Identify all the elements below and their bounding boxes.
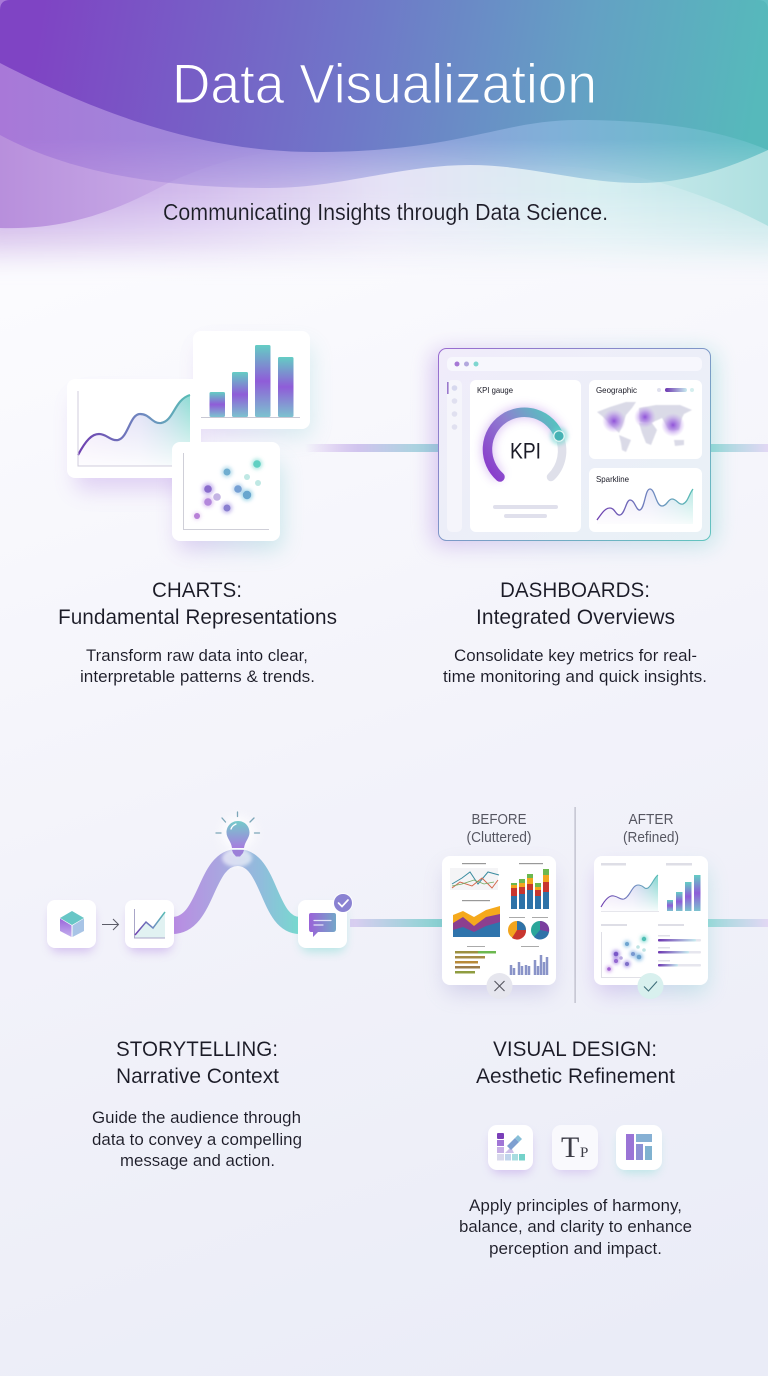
before label: (Cluttered) [466,829,532,846]
KPI gauge card: KPI gauge [477,385,513,395]
heading: dashboards: Integrated Overviews [476,606,675,629]
icon: data cube tile [47,900,96,952]
geographic map card: Geographic [596,385,638,395]
KPI gauge card: KPI [510,438,541,464]
description: visual design: balance, and clarity to enhance [459,1217,692,1236]
ribbon path [172,858,300,926]
description: charts: interpretable patterns & trends. [80,667,315,686]
badge: before cross [486,973,512,999]
connector: design onward [708,919,768,927]
before label [466,811,532,846]
panel: before cluttered dashboard [442,856,556,993]
title: Data Visualization [172,52,597,115]
heading: storytelling: Narrative Context [116,1065,279,1088]
sparkline card [589,468,702,532]
heading: charts [58,579,337,629]
heading: dashboards [476,579,675,629]
icon: chart tile [125,900,174,952]
cluttered pie charts [508,917,549,940]
window title bar [447,357,702,371]
cluttered area chart [453,900,500,937]
badge: after check [638,973,664,999]
panel: storytelling flow [47,812,353,952]
before label: BEFORE [472,811,526,828]
connector: storytelling to design [350,919,442,927]
heading: dashboards: DASHBOARDS: [500,579,650,602]
description: dashboards: Consolidate key metrics for real- [454,646,697,665]
description: storytelling: message and action. [120,1151,275,1170]
icon: lightbulb [216,812,260,856]
geographic map card [589,380,702,459]
description: storytelling: data to convey a compelling [92,1130,302,1149]
heading: storytelling: STORYTELLING: [116,1038,278,1061]
heading: charts: CHARTS: [152,579,242,602]
after label [623,811,679,846]
bar chart card [193,331,310,429]
description: charts [80,646,315,686]
panel: dashboard mockup [432,348,716,546]
icon: typography: P [580,1145,588,1161]
connector: charts to dashboards [305,444,439,452]
icon: typography: T [561,1131,579,1164]
line chart card [67,379,201,478]
refined scatter plot [602,932,656,978]
ribbon highlight [222,849,252,867]
heading: visual design: Aesthetic Refinement [476,1065,675,1088]
description: dashboards [443,646,707,686]
soft glow shadows [75,345,312,550]
after label: AFTER [628,811,674,828]
icon: layout grid [616,1125,662,1173]
cluttered horizontal bars [455,946,496,974]
KPI gauge card [470,380,581,532]
refined bar chart [667,875,700,911]
cluttered stacked bars [511,869,549,909]
refined area chart [601,875,659,912]
arrow [102,919,118,930]
description: dashboards: time monitoring and quick insights. [443,667,707,686]
sparkline card: Sparkline [596,474,629,484]
description: visual design: Apply principles of harmony, [469,1196,682,1215]
subtitle: Communicating Insights through Data Science. [163,199,608,225]
after label: (Refined) [623,829,679,846]
cluttered grouped bars [511,946,547,975]
heading: visual design: VISUAL DESIGN: [493,1038,657,1061]
heading: visual design [476,1038,675,1088]
scatter plot card [172,442,280,541]
panel: after refined dashboard [594,856,708,993]
panel: charts cluster [67,331,312,550]
icon: typography [552,1125,598,1173]
sidebar [447,380,462,532]
description: storytelling: Guide the audience through [92,1108,301,1127]
cluttered line chart [450,863,543,890]
description: visual design [459,1196,692,1258]
heading: charts: Fundamental Representations [58,606,337,629]
description: storytelling [92,1108,302,1170]
heading: storytelling [116,1038,279,1088]
header banner with waves [0,0,768,262]
description: charts: Transform raw data into clear, [86,646,308,665]
icon: colour palette [488,1125,533,1173]
description: visual design: perception and impact. [489,1239,662,1258]
refined progress bars [658,935,701,966]
icon: message tile with badge [298,893,353,952]
connector: dashboards onward [711,444,768,452]
